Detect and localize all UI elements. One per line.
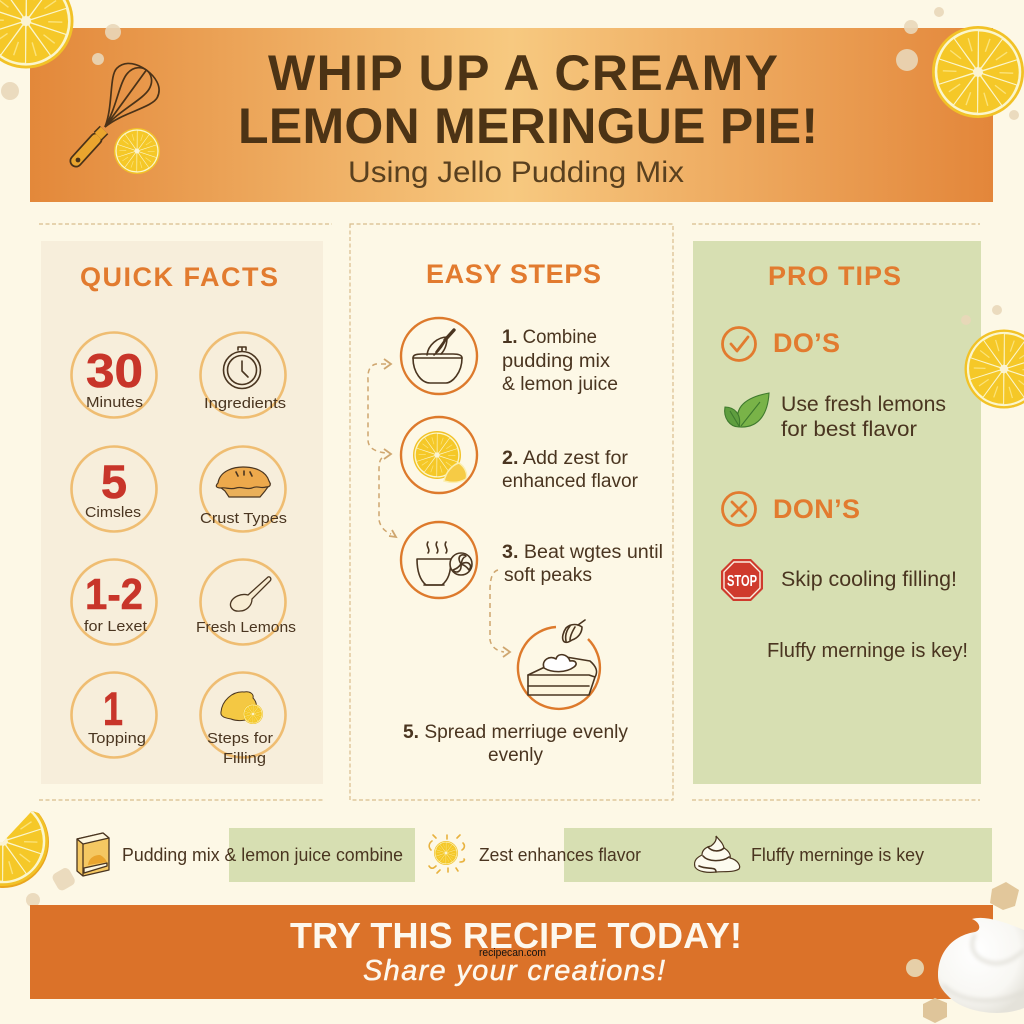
heading: easy steps: EASY STEPS xyxy=(426,259,601,289)
do's text: Use fresh lemons xyxy=(781,393,946,416)
summary text 3: Fluffy merninge is key xyxy=(751,845,924,865)
don'ts text: Skip cooling filling! xyxy=(781,568,957,591)
fact: 30 minutes: 30 xyxy=(86,344,143,397)
fact: 1-2 for lexet: for Lexet xyxy=(84,618,148,635)
icon: zest sun xyxy=(429,835,464,873)
arrow: step 2 to step 3 xyxy=(379,458,396,537)
icon: whisk xyxy=(76,55,167,162)
sugar cubes xyxy=(906,882,1019,1023)
icon: check xyxy=(722,328,756,360)
fact: 5 cimsles: Cimsles xyxy=(85,504,141,521)
step 1 text xyxy=(502,327,618,395)
step 5 icon: pie slice with whisk xyxy=(518,620,600,709)
summary text 2: Zest enhances flavor xyxy=(479,845,641,865)
fact: steps for filling with lemon icon: Steps for xyxy=(207,730,273,747)
step 1 text: & lemon juice xyxy=(502,374,618,395)
panel: easy steps xyxy=(350,224,673,800)
title xyxy=(238,45,818,154)
arrow: step 1 to step 2 xyxy=(368,359,391,459)
fact: 1 topping xyxy=(72,672,156,758)
fact: 1-2 for lexet: 1-2 xyxy=(85,570,143,619)
do's text: for best flavor xyxy=(781,418,917,441)
fact: 1 topping: Topping xyxy=(88,730,146,747)
icon: cross xyxy=(722,492,756,526)
icon: meringue dollop xyxy=(695,836,740,872)
fact: 1 topping: 1 xyxy=(103,682,123,735)
subtitle: Using Jello Pudding Mix xyxy=(348,156,684,189)
fact: 1-2 for lexet xyxy=(72,560,156,644)
watermark: recipecan.com xyxy=(479,947,546,959)
summary strip xyxy=(77,828,992,882)
summary text 1: Pudding mix & lemon juice combine xyxy=(122,845,403,865)
title: WHIP UP A CREAMY xyxy=(268,45,778,101)
step 1 text: 1. Combine xyxy=(502,327,597,348)
step 5 text: evenly xyxy=(488,745,544,766)
icon: leaf xyxy=(725,393,769,427)
fact: 30 minutes xyxy=(72,332,156,418)
fact: crust types with pie icon: Crust Types xyxy=(200,510,287,527)
fact: 30 minutes: Minutes xyxy=(86,394,143,411)
fact: 5 cimsles xyxy=(72,446,156,532)
heading: pro tips: PRO TIPS xyxy=(768,261,901,291)
step 5 text xyxy=(403,722,629,766)
fact: steps for filling with lemon icon xyxy=(200,672,286,767)
heading: do's: DO’S xyxy=(773,328,840,358)
lemon wedge xyxy=(0,811,49,888)
heading: don'ts: DON’S xyxy=(773,494,860,524)
step 3 text xyxy=(502,542,663,586)
panel: quick facts xyxy=(41,241,323,784)
step 2 text xyxy=(502,448,639,492)
footer banner xyxy=(30,905,993,999)
icon: whipped meringue xyxy=(938,918,1024,1013)
heading: quick facts: QUICK FACTS xyxy=(80,262,278,292)
fact: fresh lemons with spoon icon xyxy=(196,560,296,644)
dashed dividers xyxy=(39,224,980,800)
step 1 text: pudding mix xyxy=(502,351,611,372)
title: LEMON MERINGUE PIE! xyxy=(238,98,818,154)
icon: stop sign: STOP xyxy=(727,573,757,590)
panel: pro tips xyxy=(693,241,981,784)
step 5 text: 5. Spread merriuge evenly xyxy=(403,722,629,743)
sub call to action: Share your creations! xyxy=(363,955,665,987)
call to action: TRY THIS RECIPE TODAY! xyxy=(290,915,742,956)
tip text: Fluffy merninge is key! xyxy=(767,640,968,662)
step 3 text: soft peaks xyxy=(504,565,592,586)
arrow: step 3 to step 5 xyxy=(490,570,510,657)
icon: stop sign xyxy=(721,559,763,601)
step 2 text: 2. Add zest for xyxy=(502,448,629,469)
do's text xyxy=(781,393,946,441)
fact: crust types with pie icon xyxy=(200,446,287,532)
header banner xyxy=(30,28,993,202)
fact: 5 cimsles: 5 xyxy=(101,455,127,508)
icon: pudding box xyxy=(77,833,109,876)
fact: ingredients with stopwatch icon xyxy=(200,332,286,418)
fact: fresh lemons with spoon icon: Fresh Lemons xyxy=(196,619,296,636)
step 2 icon: lemon xyxy=(401,417,477,493)
step 1 icon: bowl and whisk xyxy=(401,318,477,394)
step 3 icon: cup with meringue swirl xyxy=(401,522,477,598)
fact: ingredients with stopwatch icon: Ingredients xyxy=(204,395,286,412)
step 3 text: 3. Beat wgtes until xyxy=(502,542,663,563)
fact: steps for filling with lemon icon: Filling xyxy=(223,750,266,767)
icon: small lemon in banner xyxy=(114,128,160,174)
step 2 text: enhanced flavor xyxy=(502,471,639,492)
